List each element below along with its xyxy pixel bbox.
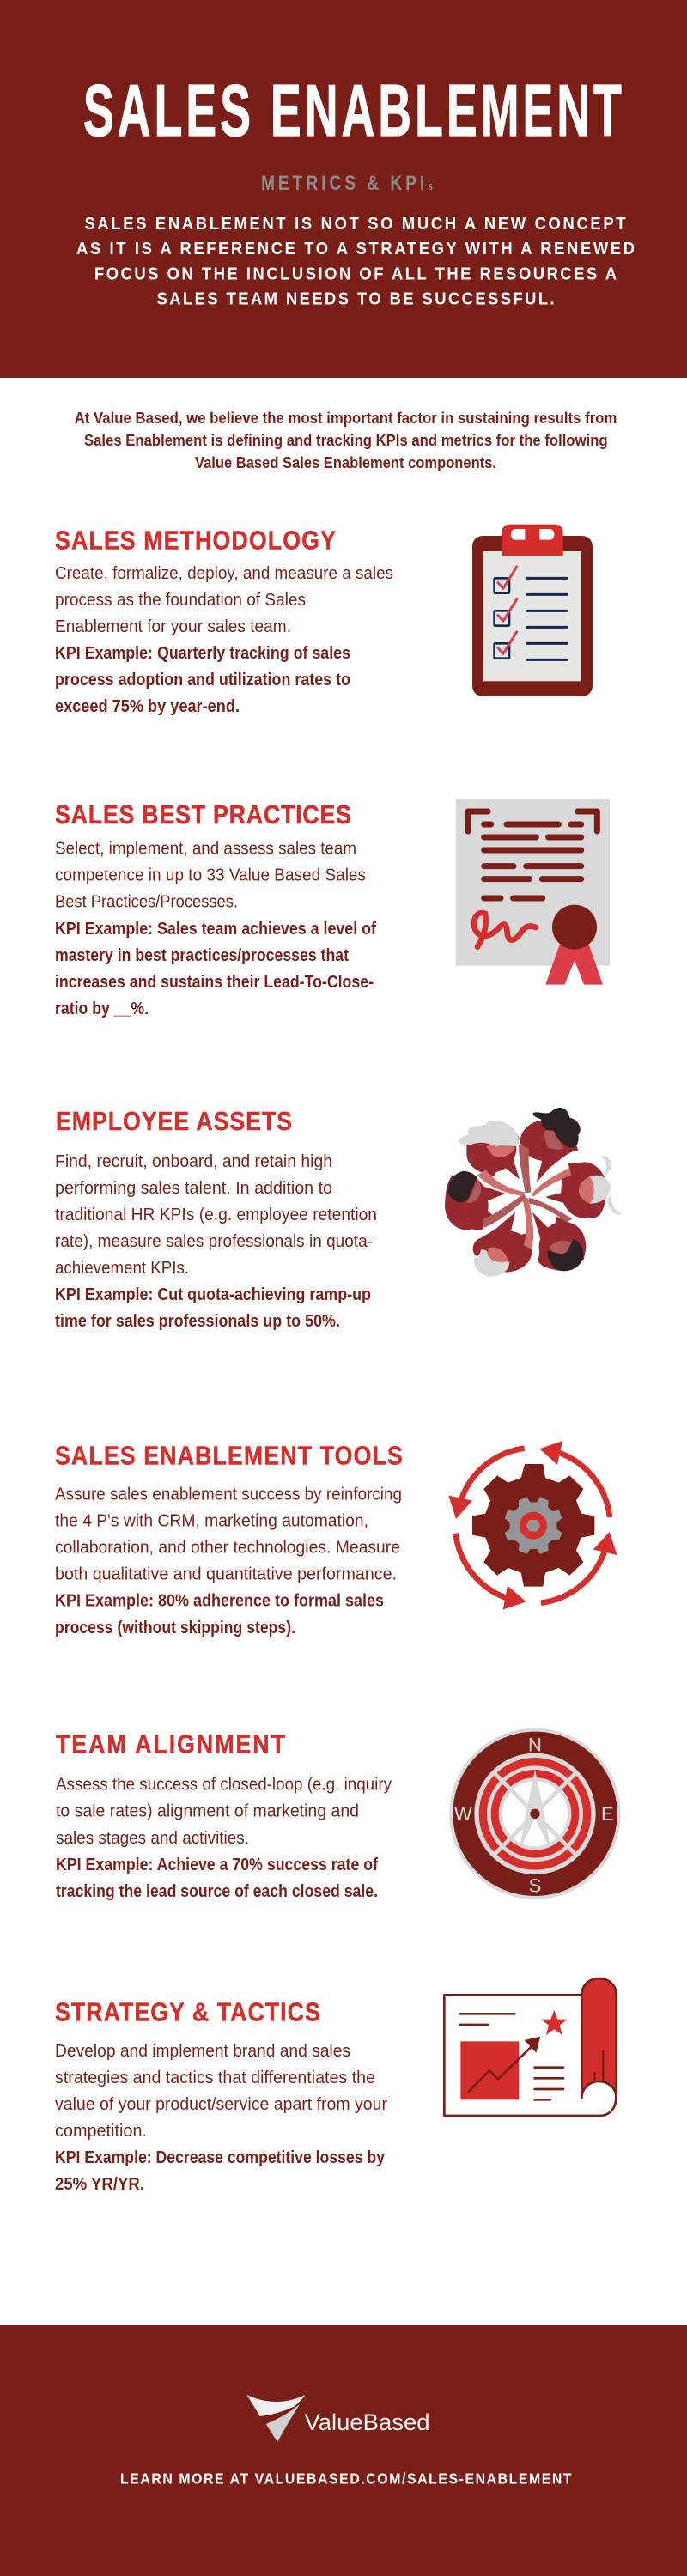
text: strategy and tactics description: competition. bbox=[55, 2122, 147, 2141]
panel: footer band bbox=[0, 2325, 687, 2576]
icon: team huddle seen from above bbox=[445, 1108, 622, 1277]
heading: employee assets: EMPLOYEE ASSETS bbox=[56, 1107, 292, 1136]
text: strategy and tactics description: KPI Example: Decrease competitive losses by bbox=[55, 2148, 386, 2167]
heading: strategy and tactics: STRATEGY & TACTICS bbox=[55, 1998, 320, 2027]
text: strategy and tactics description: value of your product/service apart from your bbox=[55, 2095, 387, 2114]
text: sales enablement tools description: KPI Example: 80% adherence to formal sales bbox=[55, 1592, 384, 1611]
text: sales methodology description: exceed 75% by year-end. bbox=[55, 697, 240, 716]
text: strategy and tactics description: 25% YR/YR. bbox=[55, 2175, 144, 2194]
text: sales methodology description: Create, formalize, deploy, and measure a sales bbox=[55, 564, 393, 583]
panel: employee assets bbox=[55, 1107, 622, 1331]
text: team alignment description bbox=[56, 1776, 392, 1901]
icon: compass bbox=[449, 1728, 621, 1899]
text: sales methodology description: process as the foundation of Sales bbox=[55, 591, 306, 610]
text: sales best practices description: Best Practices/Processes. bbox=[55, 893, 238, 912]
header paragraph: FOCUS ON THE INCLUSION OF ALL THE RESOURCES A bbox=[94, 265, 617, 284]
text: sales best practices description: KPI Example: Sales team achieves a level of bbox=[55, 920, 376, 939]
subtitle: METRICS & KPI s bbox=[261, 171, 433, 195]
heading: sales enablement tools: SALES ENABLEMENT TOOLS bbox=[55, 1442, 403, 1471]
text: sales enablement tools description: the 4 P's with CRM, marketing automation, bbox=[55, 1511, 368, 1530]
intro text: Sales Enablement is defining and tracking KPIs and metrics for the following bbox=[84, 432, 608, 449]
call to action link text: LEARN MORE AT VALUEBASED.COM/SALES-ENABLEMENT bbox=[120, 2470, 572, 2488]
text: sales enablement tools description: collaboration, and other technologies. Measure bbox=[55, 1539, 400, 1558]
text: sales methodology description: KPI Example: Quarterly tracking of sales bbox=[55, 644, 350, 663]
panel: team alignment bbox=[56, 1728, 621, 1901]
panel: header band bbox=[0, 0, 687, 378]
icon: compass: E bbox=[601, 1803, 614, 1825]
text: strategy and tactics description: Develop and implement brand and sales bbox=[55, 2042, 350, 2061]
intro text: At Value Based, we believe the most important factor in sustaining results from bbox=[75, 410, 617, 427]
text: team alignment description: sales stages and activities. bbox=[56, 1829, 249, 1848]
text: sales methodology description: Enablement for your sales team. bbox=[55, 617, 291, 636]
icon: compass: N bbox=[528, 1734, 542, 1755]
icon: clipboard checklist bbox=[472, 525, 593, 696]
text: employee assets description: performing sales talent. In addition to bbox=[55, 1179, 332, 1198]
text: strategy and tactics description: strategies and tactics that differentiates the bbox=[55, 2069, 375, 2087]
text: team alignment description: Assess the success of closed-loop (e.g. inquiry bbox=[56, 1776, 392, 1795]
icon: signed certificate bbox=[456, 799, 610, 985]
icon: compass: S bbox=[529, 1874, 541, 1896]
logo: ValueBased: ValueBased bbox=[304, 2409, 429, 2435]
icon: compass: W bbox=[454, 1803, 472, 1825]
text: sales best practices description: Select, implement, and assess sales team bbox=[55, 840, 356, 859]
text: sales enablement tools description: Assure sales enablement success by reinforcing bbox=[55, 1485, 402, 1504]
text: sales enablement tools description: process (without skipping steps). bbox=[55, 1619, 295, 1637]
text: sales best practices description bbox=[55, 840, 376, 1018]
panel: strategy and tactics bbox=[55, 1978, 617, 2194]
text: strategy and tactics description bbox=[55, 2042, 387, 2194]
text: sales methodology description: process adoption and utilization rates to bbox=[55, 671, 350, 690]
text: employee assets description: time for sales professionals up to 50%. bbox=[55, 1312, 340, 1331]
text: team alignment description: tracking the lead source of each closed sale. bbox=[56, 1882, 378, 1901]
text: team alignment description: KPI Example: Achieve a 70% success rate of bbox=[56, 1856, 378, 1874]
text: sales best practices description: increases and sustains their Lead-To-Close- bbox=[55, 973, 374, 992]
heading: sales methodology: SALES METHODOLOGY bbox=[55, 526, 336, 556]
text: sales best practices description: mastery in best practices/processes that bbox=[55, 946, 349, 965]
text: sales enablement tools description: both qualitative and quantitative performance. bbox=[55, 1565, 397, 1584]
icon: gear with cycle arrows bbox=[448, 1441, 617, 1610]
text: sales methodology description bbox=[55, 564, 393, 716]
text: employee assets description: traditional HR KPIs (e.g. employee retention bbox=[55, 1206, 377, 1224]
intro text: Value Based Sales Enablement components. bbox=[195, 454, 496, 471]
panel: sales best practices bbox=[55, 799, 610, 1018]
text: team alignment description: to sale rates) alignment of marketing and bbox=[56, 1802, 359, 1821]
panel: sales enablement tools bbox=[55, 1441, 617, 1637]
text: sales best practices description: ratio by __%. bbox=[55, 999, 149, 1018]
icon: strategy scroll with chart bbox=[444, 1978, 617, 2116]
panel: sales methodology bbox=[55, 525, 593, 716]
heading: sales best practices: SALES BEST PRACTICES bbox=[55, 800, 351, 829]
header paragraph: SALES TEAM NEEDS TO BE SUCCESSFUL. bbox=[157, 290, 555, 309]
header paragraph bbox=[76, 215, 635, 309]
text: employee assets description: achievement KPIs. bbox=[55, 1259, 189, 1278]
header paragraph: AS IT IS A REFERENCE TO A STRATEGY WITH A RENEWED bbox=[76, 240, 635, 258]
text: employee assets description: rate), measure sales professionals in quota- bbox=[55, 1232, 373, 1251]
intro text bbox=[75, 410, 617, 471]
header paragraph: SALES ENABLEMENT IS NOT SO MUCH A NEW CONCEPT bbox=[84, 215, 626, 234]
text: employee assets description: Find, recruit, onboard, and retain high bbox=[55, 1152, 332, 1171]
text: sales best practices description: competence in up to 33 Value Based Sales bbox=[55, 866, 366, 885]
title: SALES ENABLEMENT bbox=[83, 71, 622, 152]
logo: ValueBased bbox=[247, 2395, 429, 2442]
text: sales enablement tools description bbox=[55, 1485, 402, 1637]
text: employee assets description: KPI Example: Cut quota-achieving ramp-up bbox=[55, 1285, 371, 1304]
text: employee assets description bbox=[55, 1152, 377, 1331]
heading: team alignment: TEAM ALIGNMENT bbox=[56, 1730, 285, 1759]
